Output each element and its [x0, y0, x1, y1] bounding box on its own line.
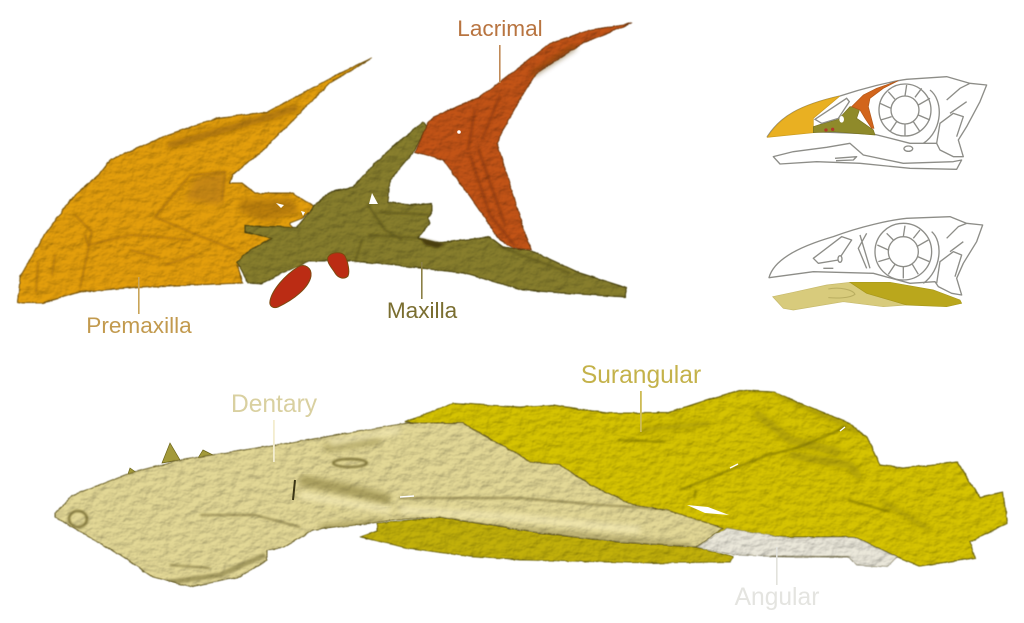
colored lacrimal of upper skull — [852, 81, 898, 128]
label: Angular — [735, 547, 819, 611]
diagram: lower skull locator — [769, 217, 983, 310]
colored maxilla of upper skull — [813, 107, 875, 135]
antorbital window of upper skull — [815, 98, 849, 123]
bone: dentary — [55, 423, 723, 587]
bone: lacrimal — [415, 23, 632, 250]
icon: maxillary teeth — [270, 253, 349, 308]
label: Surangular: Surangular — [581, 362, 701, 389]
bone: dentary teeth — [127, 443, 213, 477]
bone: surangular — [405, 390, 1007, 566]
label: Lacrimal: Lacrimal — [457, 16, 543, 41]
colored dentary of lower skull — [773, 282, 907, 310]
bone: angular — [697, 528, 897, 567]
label: Dentary — [231, 391, 318, 462]
bone: premaxilla — [18, 58, 372, 303]
label: Premaxilla: Premaxilla — [86, 313, 192, 338]
sclerotic ring of upper skull — [880, 85, 930, 136]
colored surangular of lower skull — [850, 282, 962, 307]
bone: surangular lower flange — [360, 517, 733, 563]
label: Maxilla: Maxilla — [387, 298, 458, 323]
slit between bones — [687, 505, 729, 515]
bone: maxilla — [237, 122, 627, 297]
colored premaxilla of upper skull — [767, 96, 840, 137]
label: Angular: Angular — [735, 584, 819, 611]
label: Premaxilla — [86, 277, 192, 338]
label: Dentary: Dentary — [231, 391, 318, 418]
label: Lacrimal — [457, 16, 543, 83]
label: Maxilla — [387, 262, 458, 323]
sclerotic ring of lower skull — [877, 226, 929, 278]
diagram: upper skull locator — [767, 77, 987, 169]
label: Surangular — [581, 362, 701, 432]
